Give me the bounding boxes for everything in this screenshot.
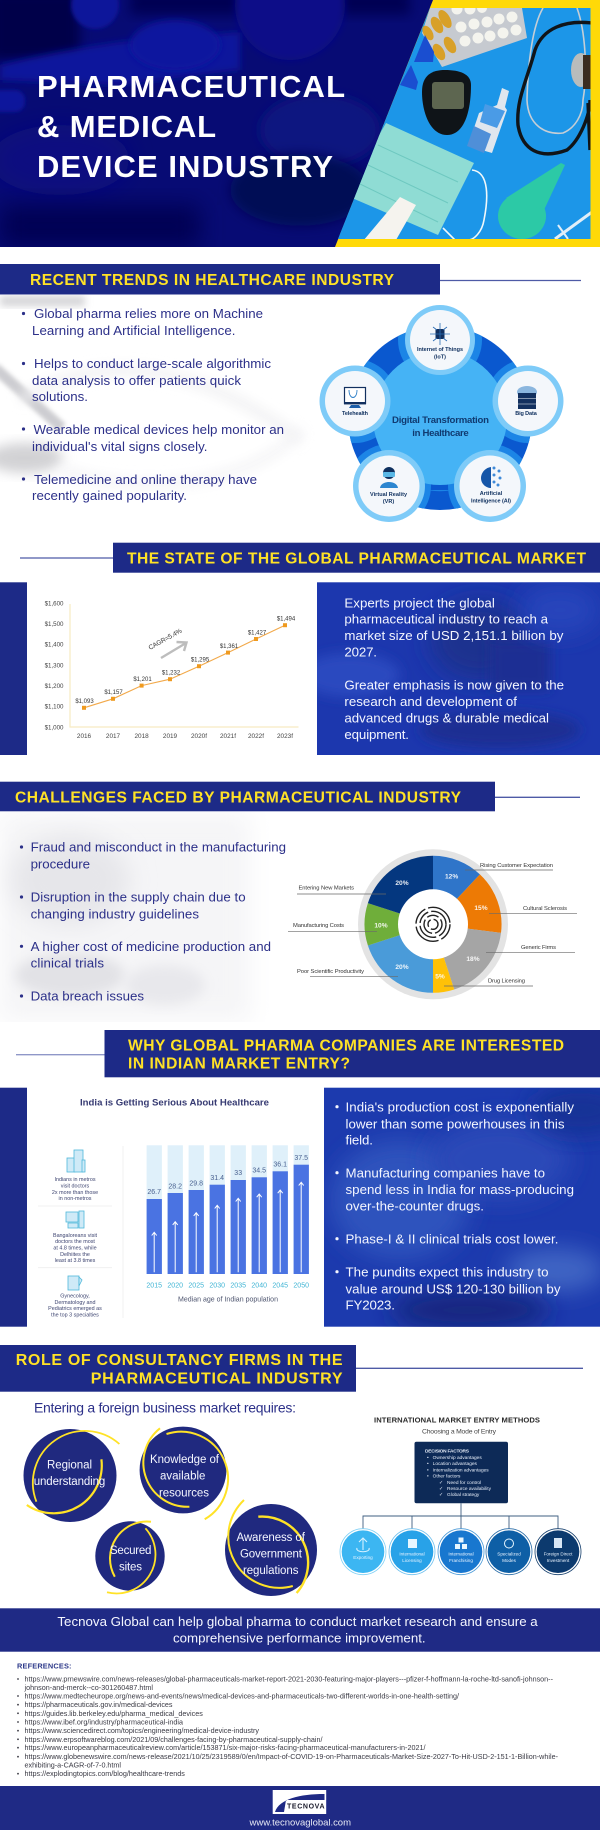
bar years: 2045 — [272, 1282, 288, 1290]
diagram: digital transformation in healthcare — [320, 305, 564, 522]
segment labels: Cultural Sclerosis — [523, 906, 567, 912]
section heading: consultancy firms — [0, 1345, 583, 1392]
data labels: $1,494 — [277, 617, 296, 623]
text block: trends bullets — [22, 306, 284, 503]
line chart: market size: CAGR=5.4% — [148, 628, 183, 652]
section heading: Indian market entry — [16, 1030, 600, 1077]
y axis labels: $1,500 — [45, 621, 64, 628]
data labels: $1,093 — [75, 699, 94, 705]
panel: market projection text: research and development of — [344, 694, 517, 709]
stat: Bangaloreans: Delhiites the — [60, 1252, 90, 1258]
decision factors box — [414, 1442, 508, 1503]
data labels: $1,232 — [162, 670, 181, 676]
references list: johnson-and-merck--co-301260487.html — [24, 1683, 153, 1692]
section heading: consultancy firms: ROLE OF CONSULTANCY FIRMS IN THE — [16, 1352, 343, 1369]
panel: market projection text: Greater emphasis is now given to the — [344, 678, 564, 693]
panel: market projection text — [300, 582, 600, 755]
text block: challenges bullets: A higher cost of medicine production and — [31, 939, 271, 954]
circle: knowledge of resources: resources — [159, 1487, 209, 1499]
mode: exporting: Exporting — [353, 1555, 373, 1560]
hero banner — [0, 0, 600, 247]
bar values: 26.7 — [147, 1189, 161, 1196]
references list: exhibiting-a-CAGR-of-7-0.html — [24, 1760, 121, 1770]
text block: challenges bullets: Disruption in the supply chain due to — [31, 890, 246, 905]
text block: trends bullets: Telemedicine and online therapy have — [34, 472, 257, 487]
mode: specialized modes: Specialized — [497, 1551, 521, 1556]
segment labels: Generic Firms — [521, 945, 556, 951]
circle: knowledge of resources — [140, 1427, 228, 1519]
node: internet of things: (IoT) — [434, 354, 446, 360]
node: artificial intelligence: Artificial — [480, 491, 503, 497]
segment labels: Poor Scientific Productivity — [297, 969, 364, 975]
bar years: 2020 — [167, 1282, 183, 1290]
growth arrow — [161, 642, 186, 658]
y axis labels: $1,400 — [45, 642, 64, 649]
y axis labels — [45, 600, 64, 731]
connectors — [363, 1503, 558, 1530]
panel: market projection text: market size of USD 2,151.1 billion by — [344, 628, 564, 643]
mode: international franchising: International — [448, 1551, 474, 1556]
line chart: market size — [45, 600, 298, 740]
circle: secured sites — [95, 1521, 165, 1593]
panel accent bar — [0, 1088, 27, 1327]
mode: exporting — [340, 1529, 386, 1575]
stat: specialties: the top 3 specialties — [51, 1313, 99, 1319]
chart caption: Median age of Indian population — [178, 1296, 278, 1304]
text block: trends bullets: Global pharma relies more on Machine — [34, 306, 263, 321]
references list: https://www.ibef.org/industry/pharmaceutical-india — [24, 1718, 183, 1726]
y axis labels: $1,200 — [45, 683, 64, 690]
left stats column — [38, 1146, 123, 1319]
hero photo of medical devices — [338, 8, 590, 239]
circle: regional understanding — [24, 1429, 119, 1522]
x axis labels: 2019 — [163, 733, 178, 740]
text block: trends bullets: recently gained popularity. — [32, 488, 187, 503]
stat: metros: visit doctors — [61, 1184, 90, 1190]
bar values: 33 — [234, 1170, 242, 1177]
panel: India market reasons — [324, 1085, 600, 1330]
bar years: 2025 — [188, 1282, 204, 1290]
panel: India market reasons: lower than some powerhouses in this — [346, 1116, 565, 1131]
stat: metros — [52, 1177, 98, 1202]
node: internet of things — [405, 305, 475, 375]
stat: specialties: Dermatology and — [54, 1300, 96, 1306]
node: virtual reality: Virtual Reality — [370, 492, 408, 498]
section heading: recent trends — [0, 264, 581, 294]
website: www.tecnovaglobal.com — [248, 1818, 351, 1829]
percentage labels: 18% — [466, 956, 480, 963]
circle: regional understanding: Regional — [47, 1460, 92, 1472]
x axis labels: 2016 — [77, 733, 92, 740]
y axis labels: $1,300 — [45, 662, 64, 669]
icon: clipboard — [68, 1276, 82, 1290]
diagram: international market entry methods: Choosing a Mode of Entry — [422, 1428, 497, 1435]
title: & MEDICAL — [37, 109, 216, 144]
node: internet of things: Internet of Things — [417, 347, 463, 353]
text block: trends bullets: Learning and Artificial Intelligence. — [32, 323, 236, 338]
y axis labels: $1,100 — [45, 704, 64, 710]
stat: specialties: Gynecology, — [60, 1294, 90, 1300]
mode: international franchising — [438, 1529, 484, 1575]
segment labels — [293, 863, 567, 984]
mode: international licensing: International — [399, 1551, 425, 1556]
references list: https://pharmaceuticals.gov.in/medical-devices — [24, 1700, 173, 1709]
x axis labels: 2018 — [134, 733, 149, 740]
circle: government regulations: Government — [240, 1549, 303, 1561]
y axis labels: $1,600 — [45, 600, 64, 608]
data labels: $1,295 — [191, 657, 210, 663]
chart title: India is Getting Serious About Healthcare — [80, 1098, 269, 1108]
panel: India market reasons: spend less in India for mass-producing — [346, 1182, 574, 1197]
x axis labels — [77, 733, 293, 740]
mode: international franchising: Franchising — [449, 1558, 473, 1563]
decision factors box: • Ownership advantages — [427, 1455, 482, 1461]
decision factors box: • Internalization advantages — [427, 1468, 489, 1474]
mode: foreign direct investment — [535, 1529, 581, 1575]
bar years: 2040 — [251, 1282, 267, 1290]
panel: India market reasons: Manufacturing companies have to — [346, 1166, 545, 1181]
data labels: $1,427 — [248, 631, 267, 637]
bar years: 2030 — [209, 1282, 225, 1290]
bar chart: median age — [146, 1145, 309, 1304]
node: telehealth — [320, 366, 390, 436]
x axis labels: 2022f — [248, 733, 264, 740]
text block: challenges bullets: Fraud and misconduct in the manufacturing — [31, 840, 286, 855]
bar years: 2015 — [146, 1282, 162, 1290]
data labels: $1,157 — [104, 690, 123, 696]
bar arrows — [152, 1182, 304, 1272]
subheading: requirements: Entering a foreign business market requires: — [34, 1399, 296, 1415]
circle: regional understanding: understanding — [34, 1476, 105, 1488]
icon: maze — [416, 907, 450, 941]
text block: challenges bullets: clinical trials — [31, 956, 104, 971]
data labels — [75, 617, 296, 705]
node: artificial intelligence: Intelligence (AI) — [471, 498, 511, 504]
node: artificial intelligence — [454, 450, 526, 522]
percentage labels — [374, 874, 488, 980]
logo: Tecnova: TECNOVA — [287, 1804, 324, 1810]
percentage labels: 5% — [435, 974, 445, 980]
mode: foreign direct investment: Investment — [547, 1558, 570, 1563]
call to action band — [0, 1608, 600, 1652]
section heading: Indian market entry: IN INDIAN MARKET ENTRY? — [128, 1056, 350, 1073]
node: virtual reality — [353, 450, 425, 522]
mode: specialized modes — [486, 1529, 532, 1575]
percentage labels: 12% — [445, 874, 458, 880]
mode: international licensing: Licensing — [402, 1558, 422, 1563]
circle: government regulations: regulations — [243, 1565, 299, 1577]
x axis labels: 2021f — [220, 733, 236, 740]
percentage labels: 10% — [374, 922, 388, 930]
section heading: global pharmaceutical market — [20, 543, 600, 573]
stat: specialties — [48, 1294, 102, 1319]
stat: specialties: Pediatrics emerged as — [48, 1306, 102, 1312]
bar years: 2035 — [230, 1282, 246, 1290]
text block: challenges bullets: changing industry guidelines — [31, 906, 199, 921]
text block: trends bullets: Wearable medical devices help monitor an — [34, 422, 284, 437]
circle: secured sites: Secured — [110, 1545, 151, 1557]
bar values: 28.2 — [168, 1184, 182, 1190]
diagram centre label — [392, 415, 489, 439]
title: DEVICE INDUSTRY — [37, 149, 333, 184]
text block: trends bullets: Helps to conduct large-scale algorithmic — [34, 356, 271, 371]
bar values: 37.5 — [294, 1155, 308, 1162]
title: PHARMACEUTICAL — [37, 69, 345, 104]
y axis labels: $1,000 — [45, 724, 64, 731]
stat: Bangaloreans: Bangaloreans visit — [53, 1233, 98, 1239]
references list: https://www.globenewswire.com/news-release/2021/10/25/2319589/0/en/Impact-of-COVID-19-on-Pharmaceuticals-Market-Size-2027-To-Hit-USD-2-151-1-Billion-while- — [24, 1752, 559, 1761]
stat: Bangaloreans — [53, 1233, 98, 1264]
circle: government regulations: Awareness of — [236, 1532, 306, 1544]
stat: metros: 2x more than those — [52, 1190, 98, 1196]
circle: government regulations — [225, 1500, 317, 1596]
segment labels: Drug Licensing — [488, 978, 525, 984]
section heading: challenges: CHALLENGES FACED BY PHARMACEUTICAL INDUSTRY — [15, 789, 462, 806]
text block: trends bullets: individual's vital signs closely. — [32, 439, 208, 454]
decision factors box: • Other factors — [427, 1474, 461, 1480]
panel: India market reasons: value around US$ 120-130 billion by — [346, 1281, 561, 1296]
x axis labels: 2017 — [106, 733, 121, 740]
references list: https://www.erpsoftwareblog.com/2021/09/challenges-facing-by-pharmaceutical-supply-chain/ — [24, 1735, 322, 1744]
call to action band: Tecnova Global can help global pharma to conduct market research and ensure a — [57, 1614, 538, 1629]
diagram: international market entry methods: INTERNATIONAL MARKET ENTRY METHODS — [374, 1415, 540, 1424]
mode: foreign direct investment: Foreign Direct — [544, 1551, 573, 1556]
bar years: 2050 — [293, 1282, 309, 1290]
diagram centre label: in Healthcare — [412, 428, 469, 439]
panel: India market reasons: Phase-I & II clinical trials cost lower. — [346, 1232, 558, 1247]
stat: Bangaloreans: doctors the most — [55, 1239, 95, 1245]
section heading: consultancy firms: PHARMACEUTICAL INDUSTRY — [91, 1371, 343, 1388]
node: virtual reality: (VR) — [383, 499, 394, 505]
icon: city buildings — [67, 1150, 85, 1172]
decision factors box: ✓ Resource availability — [439, 1486, 492, 1492]
percentage labels: 20% — [395, 880, 409, 887]
decision factors box: ✓ Global strategy — [439, 1492, 480, 1498]
panel: India market reasons: over-the-counter drugs. — [346, 1199, 484, 1214]
section heading: challenges — [0, 782, 580, 811]
bar values: 29.8 — [189, 1180, 203, 1188]
mode: international licensing — [389, 1529, 435, 1575]
segment labels: Manufacturing Costs — [293, 923, 344, 929]
references list: https://www.prnewswire.com/news-releases/global-pharmaceuticals-market-report-2021-2030-featuring-major-players---pfizer-f-hoffmann-la-roche-ltd-sanofi-johnson-- — [24, 1674, 554, 1684]
bar values — [147, 1155, 308, 1196]
stat: metros: in non-metros — [59, 1196, 92, 1202]
bar values: 36.1 — [273, 1162, 287, 1168]
panel: market projection text: 2027. — [344, 645, 377, 660]
circle: secured sites: sites — [119, 1562, 142, 1574]
section heading: Indian market entry: WHY GLOBAL PHARMA COMPANIES ARE INTERESTED — [128, 1038, 564, 1055]
panel: market projection text: Experts project the global — [344, 595, 495, 610]
panel: market projection text: advanced drugs & durable medical — [344, 711, 549, 726]
stat: metros: Indians in metros — [54, 1177, 96, 1183]
section heading: recent trends: RECENT TRENDS IN HEALTHCARE INDUSTRY — [30, 272, 395, 289]
hero yellow frame — [335, 0, 600, 247]
bar values: 34.5 — [252, 1168, 266, 1174]
diagram: international market entry methods — [340, 1415, 581, 1575]
references list: https://www.medtecheurope.org/news-and-events/news/medical-devices-and-pharmaceuticals-two-different-worlds-in-one-health-setting/ — [24, 1692, 459, 1700]
text block: trends bullets: solutions. — [32, 389, 88, 404]
title — [37, 69, 345, 184]
panel accent bar — [0, 582, 27, 755]
x axis labels: 2020f — [191, 733, 207, 740]
diagram centre label: Digital Transformation — [392, 415, 489, 426]
decision factors box: DECISION FACTORS — [425, 1449, 470, 1455]
data labels: $1,361 — [220, 644, 239, 650]
circle: knowledge of resources: available — [160, 1471, 205, 1483]
panel: India market reasons: FY2023. — [346, 1298, 395, 1313]
panel: India market reasons: India's production cost is exponentially — [346, 1100, 574, 1115]
section heading: global pharmaceutical market: THE STATE OF THE GLOBAL PHARMACEUTICAL MARKET — [127, 550, 586, 567]
references list: https://guides.lib.berkeley.edu/pharma_medical_devices — [24, 1709, 203, 1718]
data labels: $1,201 — [133, 677, 152, 683]
decision factors box: ✓ Need for control — [439, 1480, 481, 1486]
node: big data — [492, 366, 564, 436]
donut chart: challenges share — [288, 849, 577, 999]
panel: India market reasons: field. — [346, 1133, 373, 1148]
logo: Tecnova — [273, 1790, 326, 1814]
bar values: 31.4 — [210, 1175, 224, 1182]
call to action band: comprehensive performance improvement. — [173, 1631, 426, 1646]
segment labels: Entering New Markets — [298, 886, 354, 892]
percentage labels: 15% — [474, 905, 488, 912]
text block: challenges bullets: procedure — [31, 856, 90, 871]
references heading: REFERENCES: — [17, 1661, 72, 1670]
stat: Bangaloreans: least at 3.8 times — [55, 1258, 96, 1264]
icon: clinic devices — [66, 1211, 84, 1228]
references list: https://www.europeanpharmaceuticalreview.com/article/153871/six-major-risks-facing-pharmaceutical-manufacturers-in-2021/ — [24, 1743, 426, 1752]
text block: challenges bullets: Data breach issues — [31, 989, 144, 1004]
mode: specialized modes: Modes — [502, 1558, 517, 1563]
references list — [17, 1674, 559, 1778]
references list: https://www.sciencedirect.com/topics/engineering/medical-device-industry — [24, 1726, 259, 1735]
section 1 background image — [0, 296, 300, 484]
text block: trends bullets: data analysis to offer patients quick — [32, 373, 241, 388]
text block: challenges bullets — [20, 840, 286, 1004]
panel: market projection text: pharmaceutical industry to reach a — [344, 612, 549, 627]
node: telehealth: Telehealth — [342, 411, 369, 417]
bar years — [146, 1282, 309, 1290]
leader lines — [288, 870, 577, 986]
section 3 background image — [0, 820, 239, 1014]
panel: market projection text: equipment. — [344, 727, 409, 742]
circle: knowledge of resources: Knowledge of — [150, 1454, 220, 1466]
x axis labels: 2023f — [277, 733, 293, 740]
panel: India market reasons: The pundits expect this industry to — [346, 1265, 548, 1280]
node: big data: Big Data — [515, 411, 538, 417]
segment labels: Rising Customer Expectation — [480, 863, 553, 869]
references list: https://explodingtopics.com/blog/healthcare-trends — [24, 1769, 185, 1778]
stat: Bangaloreans: at 4.8 times, while — [53, 1246, 97, 1252]
percentage labels: 20% — [395, 964, 409, 971]
decision factors box: • Location advantages — [427, 1461, 478, 1467]
footer — [0, 1786, 600, 1830]
